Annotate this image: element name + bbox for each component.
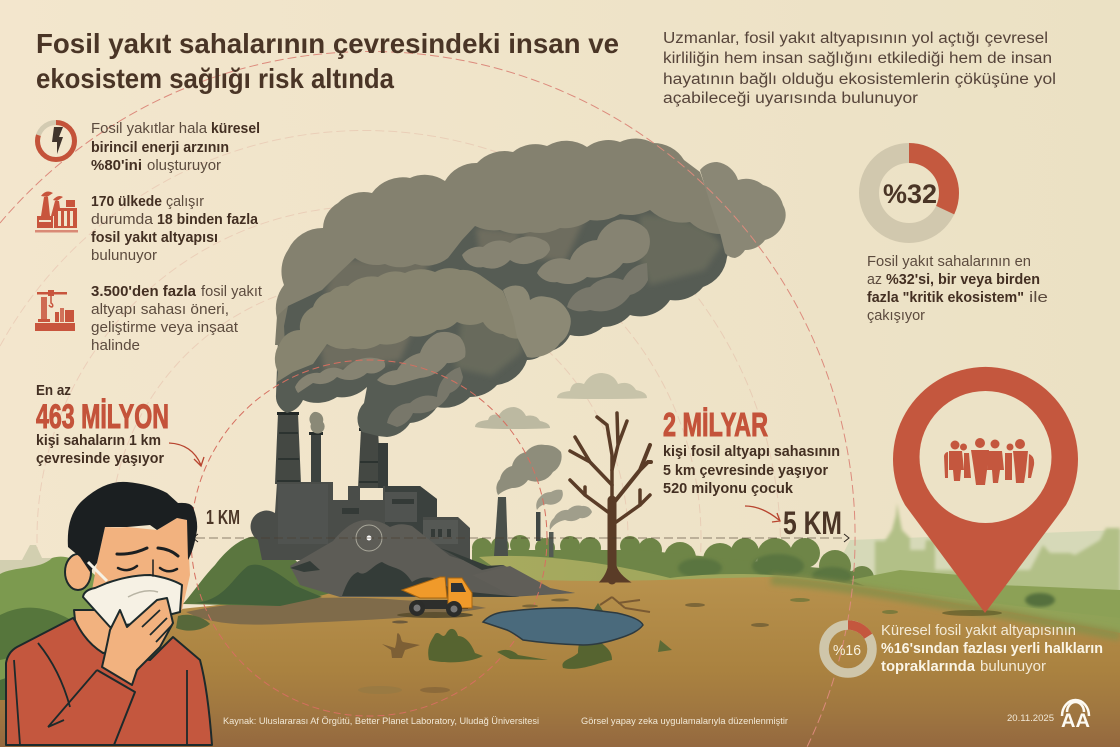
fact: 170 countries: bulunuyor xyxy=(91,248,157,264)
fact: 3500 proposals: fosil yakıt xyxy=(201,284,262,300)
location pin xyxy=(893,367,1078,616)
faint distance rings xyxy=(0,130,781,747)
distant landscape xyxy=(0,503,1120,640)
date: 20.11.2025 xyxy=(1007,713,1054,724)
fact: 32 percent: ile xyxy=(1029,290,1048,306)
fact: 32 percent: fazla "kritik ekosistem" xyxy=(867,290,1024,306)
fact: 170 countries: 170 ülkede xyxy=(91,194,162,210)
fact: 170 countries: durumda xyxy=(91,212,154,228)
fact: 80 percent: birincil enerji arzının xyxy=(91,140,229,156)
pond xyxy=(483,608,643,645)
coal pile xyxy=(290,520,575,597)
arrow: 2 billion to 5 km xyxy=(745,506,780,522)
arrow: 463 million to ring xyxy=(169,443,204,466)
intro text: hayatının bağlı olduğu ekosistemlerin çöküşüne yol xyxy=(663,71,1056,88)
icon: group of people xyxy=(944,438,1034,485)
fact: 32 percent xyxy=(867,254,1048,324)
title: ekosistem sağlığı risk altında xyxy=(36,63,394,94)
fact: 170 countries xyxy=(91,194,259,264)
source line: Kaynak: Uluslararası Af Örgütü, Better Planet Laboratory, Uludağ Üniversitesi xyxy=(223,716,539,727)
label: 1 km: 1 KM xyxy=(206,507,240,529)
callout: 463 million: 463 MİLYON xyxy=(36,398,169,436)
dead tree xyxy=(570,413,651,582)
ground bushes and debris xyxy=(358,597,898,694)
fact: 80 percent: küresel xyxy=(211,121,260,137)
intro text: açabileceği uyarısında bulunuyor xyxy=(663,90,918,107)
intro text: kirliliğin hem insan sağlığını etkilediği hem de insan xyxy=(663,50,1052,67)
fact: 16 percent xyxy=(881,623,1103,675)
fact: 170 countries: çalışır xyxy=(166,194,204,210)
fact: 3500 proposals: altyapı sahası öneri, xyxy=(91,302,229,318)
fact: 16 percent: Küresel fosil yakıt altyapısının xyxy=(881,623,1076,639)
fact: 170 countries: 18 binden fazla xyxy=(157,212,259,228)
dump truck xyxy=(397,577,473,618)
icon: 80 percent donut xyxy=(38,122,74,160)
5 km circle xyxy=(0,51,855,747)
ground and hills xyxy=(0,537,1120,747)
fact: 3500 proposals: 3.500'den fazla xyxy=(91,284,197,300)
icon: factory xyxy=(35,192,78,232)
fact: 80 percent: Fosil yakıtlar hala xyxy=(91,121,208,137)
chart: 32 percent donut: %32 xyxy=(883,179,937,209)
fact: 16 percent: topraklarında xyxy=(881,659,976,675)
title: Fosil yakıt sahalarının çevresindeki insan ve xyxy=(36,28,619,59)
fact: 80 percent xyxy=(91,121,260,174)
callout: 463 million: En az xyxy=(36,383,71,399)
intro text xyxy=(663,30,1056,107)
fact: 32 percent: Fosil yakıt sahalarının en xyxy=(867,254,1031,270)
fact: 16 percent: %16'sından fazlası yerli halkların xyxy=(881,641,1103,657)
fact: 3500 proposals: halinde xyxy=(91,338,140,354)
icon: crane and plant xyxy=(35,290,75,331)
chart: 16 percent donut: %16 xyxy=(833,642,861,659)
fact: 80 percent: oluşturuyor xyxy=(147,158,221,174)
callout: 463 million: kişi sahaların 1 km xyxy=(36,433,161,449)
fact: 32 percent: %32'si, bir veya birden xyxy=(886,272,1040,288)
big smoke plume xyxy=(275,138,786,437)
callout: 2 billion: 2 MİLYAR xyxy=(663,406,768,443)
man with mask xyxy=(6,482,212,745)
center marker xyxy=(356,525,382,551)
AA logo xyxy=(1061,700,1090,732)
chart: 16 percent donut xyxy=(824,625,872,673)
fact: 3500 proposals xyxy=(91,284,262,354)
label: 5 km: 5 KM xyxy=(783,505,842,541)
distant chimneys and smoke xyxy=(494,445,592,557)
fact: 3500 proposals: geliştirme veya inşaat xyxy=(91,320,238,336)
fact: 16 percent: bulunuyor xyxy=(980,659,1046,675)
fact: 32 percent: az xyxy=(867,272,882,288)
callout: 2 billion: kişi fosil altyapı sahasının xyxy=(663,444,840,460)
fact: 80 percent: %80'ini xyxy=(91,158,142,174)
callout: 463 million: çevresinde yaşıyor xyxy=(36,451,164,467)
title xyxy=(36,28,619,94)
factory xyxy=(251,412,470,560)
callout: 2 billion: 5 km çevresinde yaşıyor xyxy=(663,463,828,479)
callout: 463 million xyxy=(36,383,169,467)
AA logo: AA xyxy=(1061,711,1090,732)
callout: 2 billion: 520 milyonu çocuk xyxy=(663,481,794,497)
1 km circle xyxy=(191,360,547,716)
small clouds xyxy=(475,373,647,429)
AI note: Görsel yapay zeka uygulamalarıyla düzenlenmiştir xyxy=(581,716,788,727)
intro text: Uzmanlar, fosil yakıt altyapısının yol açtığı çevresel xyxy=(663,30,1048,47)
callout: 2 billion xyxy=(663,406,840,497)
dashed distance line xyxy=(193,534,849,542)
fact: 32 percent: çakışıyor xyxy=(867,308,925,324)
chart: 32 percent donut xyxy=(869,153,949,233)
fact: 170 countries: fosil yakıt altyapısı xyxy=(91,230,218,246)
